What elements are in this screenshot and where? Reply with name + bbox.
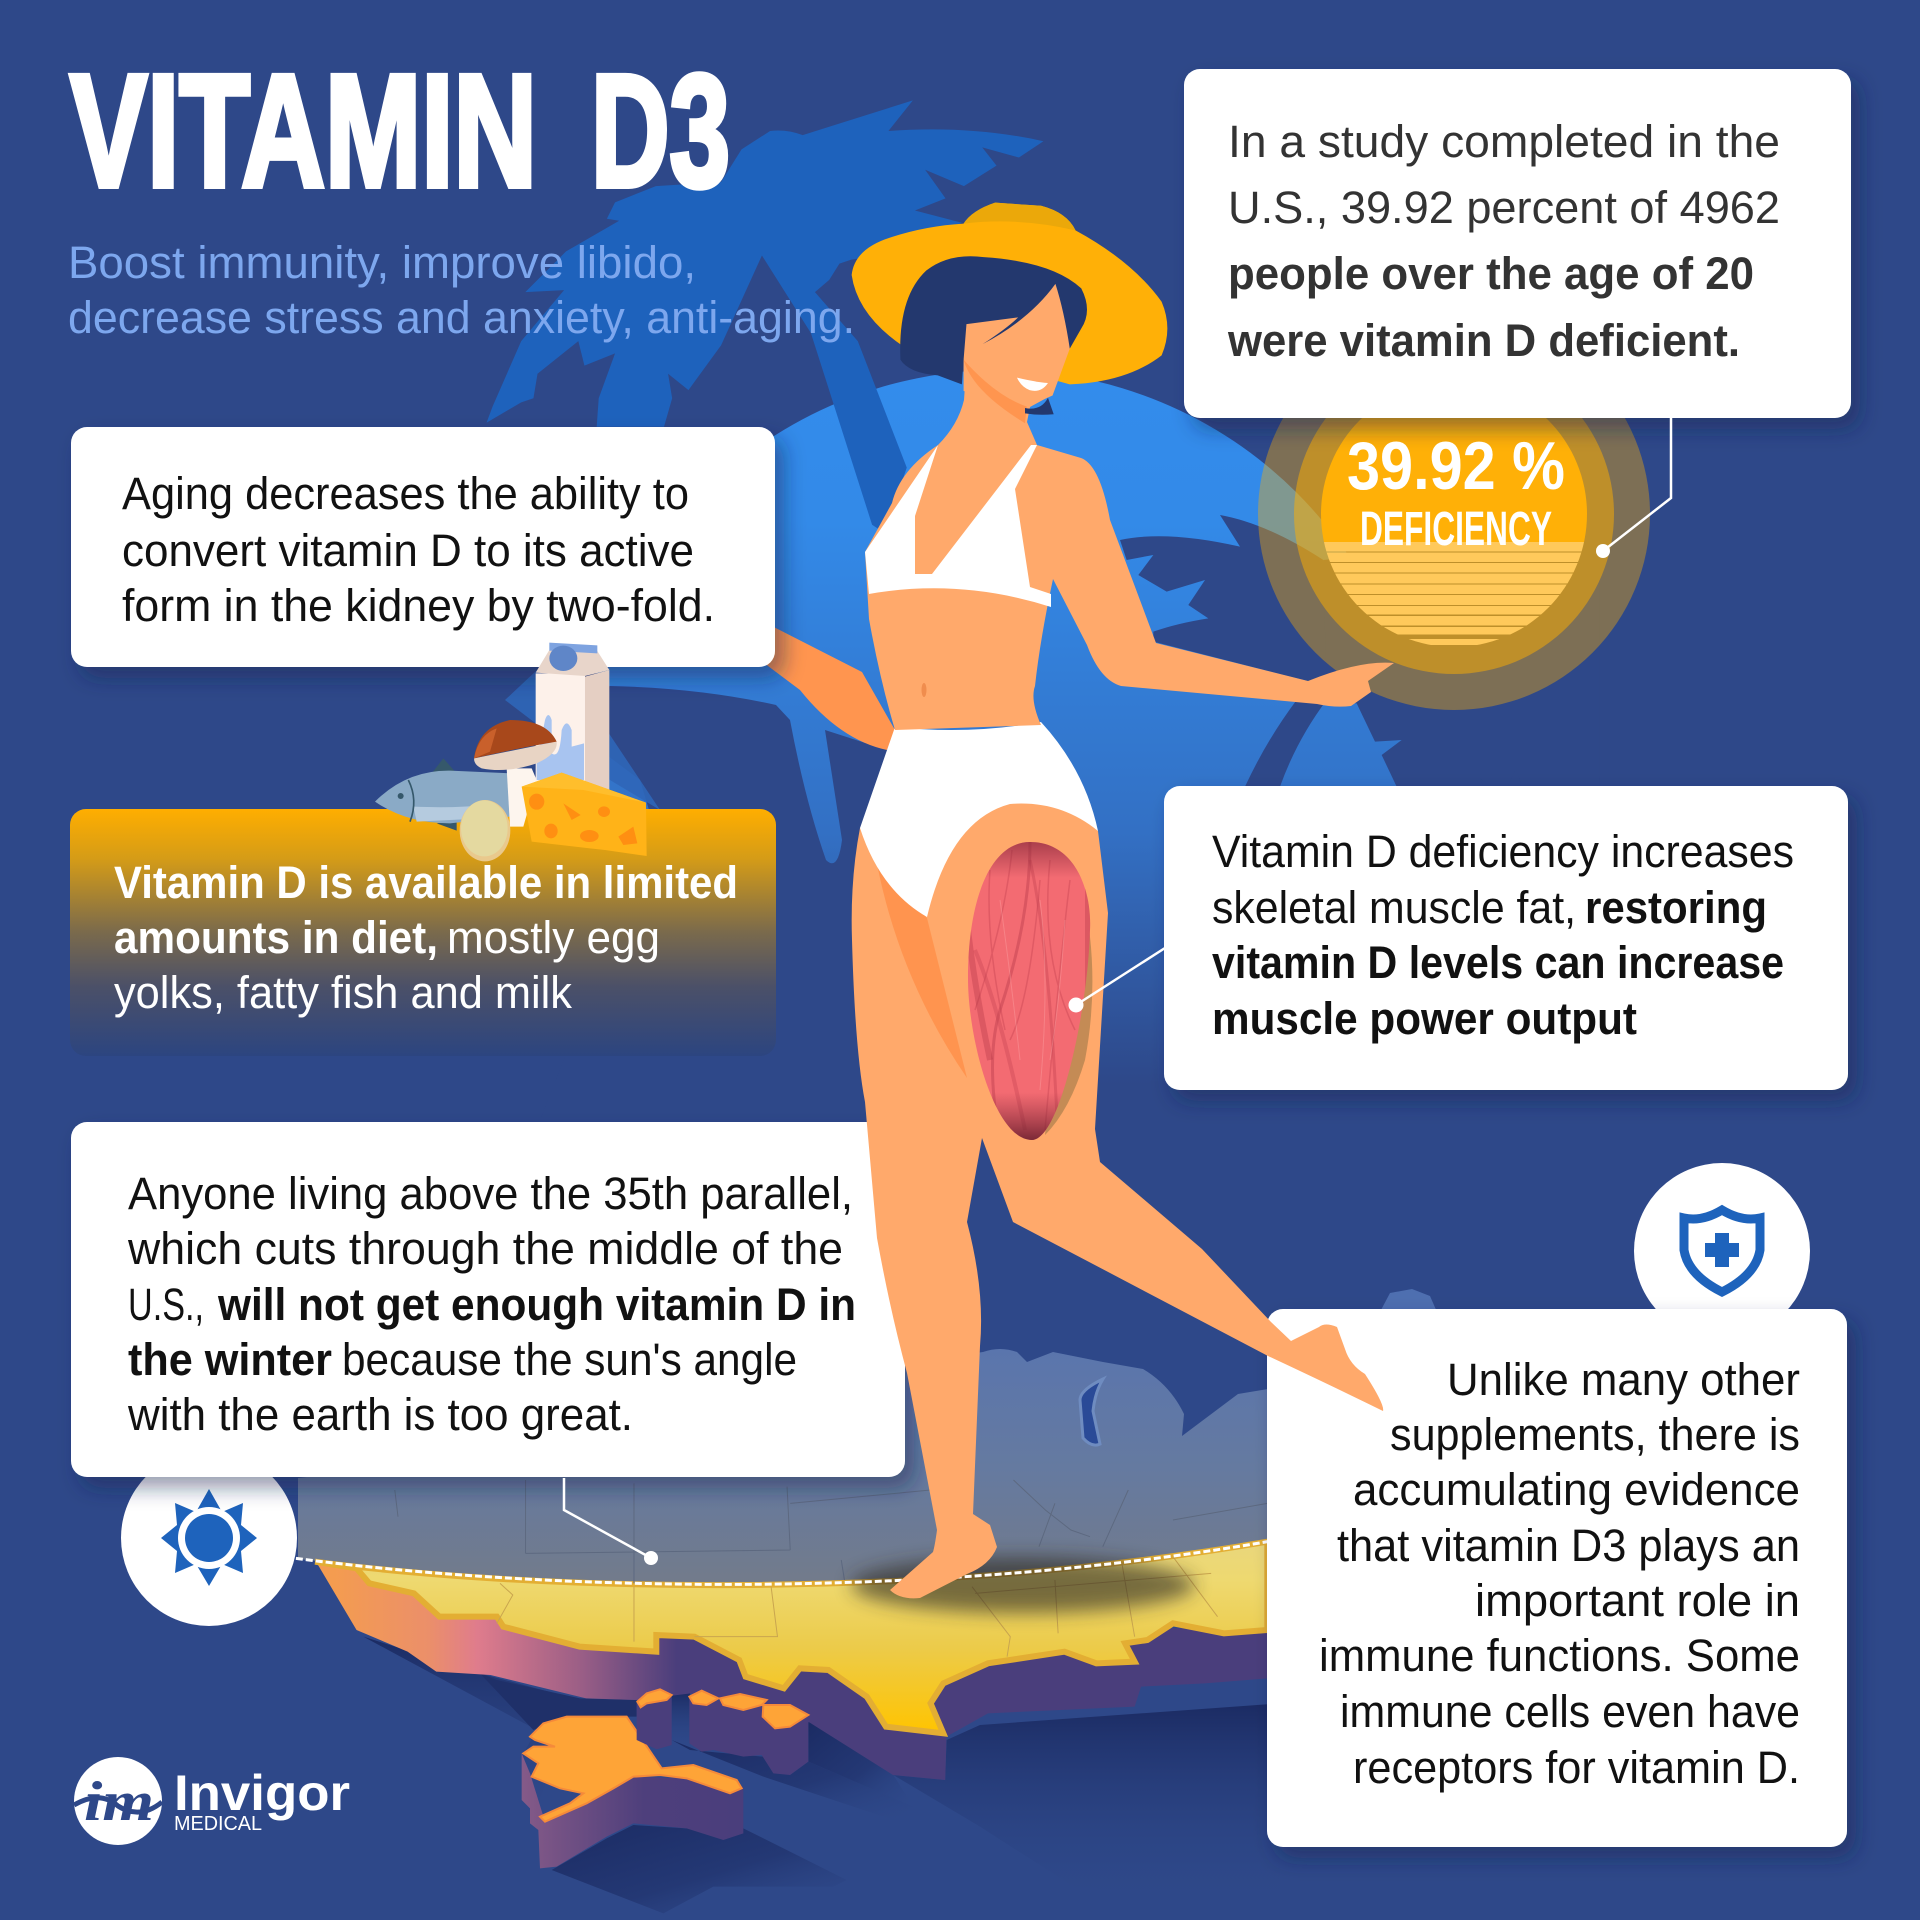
icon: milk carton bbox=[536, 643, 609, 790]
text: muscle: muscle power output bbox=[1212, 993, 1637, 1044]
figure: head bbox=[900, 256, 1087, 423]
parallel dashed line bbox=[296, 1542, 1267, 1584]
text: study: people over the age of 20 bbox=[1228, 248, 1754, 299]
text: study: were vitamin D deficient. bbox=[1227, 315, 1740, 366]
card: aging bbox=[71, 427, 775, 667]
text: study: U.S., 39.92 percent of 4962 bbox=[1228, 182, 1780, 233]
text: diet: Vitamin D is available in limited bbox=[114, 857, 738, 908]
palm tree: top bbox=[487, 100, 1043, 533]
palm leaf: lower left highlight bbox=[505, 670, 660, 810]
map: USA north, winter zone bbox=[298, 1349, 1300, 1587]
icon: mushroom bbox=[474, 720, 557, 827]
card: immune bbox=[1267, 1309, 1847, 1847]
palm fronds: lower left bbox=[540, 686, 887, 1120]
subtitle bbox=[68, 237, 855, 343]
figure: back arm bbox=[760, 620, 895, 750]
icon: cheese bbox=[522, 773, 647, 856]
card: diet bbox=[70, 809, 776, 1056]
map: side wall bbox=[315, 1560, 1267, 1780]
text: immune bbox=[1319, 1354, 1800, 1793]
text: aging: Aging decreases the ability to bbox=[122, 468, 689, 519]
text: muscle: restoring bbox=[1585, 882, 1767, 933]
text: diet bbox=[114, 857, 738, 1018]
logo: Invigor Medical: MEDICAL bbox=[174, 1813, 262, 1835]
text: diet: yolks, fatty fish and milk bbox=[114, 967, 572, 1018]
text: parallel: Anyone living above the 35th parallel, bbox=[128, 1168, 853, 1219]
text: immune: important role in bbox=[1475, 1575, 1800, 1626]
text: immune: immune cells even have bbox=[1340, 1686, 1800, 1737]
text: parallel: with the earth is too great. bbox=[127, 1389, 633, 1440]
logo: Invigor Medical bbox=[74, 1757, 350, 1845]
text: parallel: will not get enough vitamin D in bbox=[217, 1279, 856, 1330]
text: immune: receptors for vitamin D. bbox=[1353, 1742, 1800, 1793]
sun disc backdrop bbox=[580, 370, 1420, 1210]
palm tree: right bbox=[1120, 515, 1600, 787]
text: immune: immune functions. Some bbox=[1319, 1630, 1800, 1681]
text: parallel: because the sun's angle bbox=[342, 1334, 797, 1385]
title: VITAMIN bbox=[70, 41, 537, 220]
map: foot shadow bbox=[851, 1557, 1195, 1613]
map: Alaska bbox=[522, 1717, 743, 1868]
subtitle: Boost immunity, improve libido, bbox=[68, 237, 696, 288]
text: parallel: U.S., bbox=[128, 1279, 204, 1330]
map: Lake Michigan bbox=[1080, 1379, 1103, 1445]
text: study bbox=[1227, 116, 1780, 366]
figure: bikini top bbox=[865, 445, 1051, 607]
figure: navel bbox=[922, 683, 926, 697]
figure: inner thigh shade bbox=[877, 864, 967, 1078]
text: muscle: Vitamin D deficiency increases bbox=[1212, 826, 1794, 877]
text: immune: accumulating evidence bbox=[1353, 1464, 1800, 1515]
shield icon circle bbox=[1634, 1163, 1810, 1339]
icon: egg bbox=[460, 800, 510, 861]
map state lines bbox=[395, 1480, 1267, 1657]
text: muscle: vitamin D levels can increase bbox=[1212, 937, 1784, 988]
text: muscle: skeletal muscle fat, bbox=[1212, 882, 1576, 933]
map: west coast edge bbox=[299, 1480, 353, 1565]
figure: woman bbox=[852, 203, 1394, 1598]
sun badge bbox=[1258, 418, 1650, 710]
text: parallel bbox=[127, 1168, 856, 1440]
logo: Invigor Medical: im bbox=[84, 1771, 154, 1833]
map: south, sunny zone bbox=[315, 1542, 1267, 1733]
text: aging bbox=[122, 468, 715, 631]
logo: Invigor Medical: Invigor bbox=[174, 1765, 350, 1821]
text: immune: that vitamin D3 plays an bbox=[1337, 1520, 1800, 1571]
figure: legs bbox=[852, 785, 1383, 1598]
card: study bbox=[1184, 69, 1851, 418]
text: immune: supplements, there is bbox=[1390, 1409, 1800, 1460]
connector: parallel bbox=[564, 1478, 658, 1565]
subtitle: decrease stress and anxiety, anti-aging. bbox=[68, 292, 855, 343]
map: Maine peeking above card bbox=[1381, 1289, 1437, 1312]
badge value bbox=[1347, 428, 1565, 556]
icon: fish bbox=[375, 758, 510, 831]
text: study: In a study completed in the bbox=[1228, 116, 1780, 167]
card: parallel bbox=[71, 1122, 905, 1477]
text: diet: amounts in diet, bbox=[114, 912, 438, 963]
figure: exposed muscle bbox=[968, 842, 1092, 1140]
text: aging: form in the kidney by two-fold. bbox=[122, 580, 715, 631]
map: Hawaii bbox=[637, 1689, 808, 1775]
connector: sun badge bbox=[1596, 418, 1671, 558]
badge value: DEFICIENCY bbox=[1360, 503, 1552, 556]
text: aging: convert vitamin D to its active bbox=[122, 525, 694, 576]
text: parallel: which cuts through the middle of the bbox=[127, 1223, 843, 1274]
badge value: 39.92 % bbox=[1347, 428, 1565, 504]
sun icon circle bbox=[121, 1450, 297, 1626]
text: diet: mostly egg bbox=[447, 912, 660, 963]
long shadows of map bbox=[363, 1637, 1280, 1913]
figure: bikini bottom bbox=[860, 722, 1098, 917]
title: D3 bbox=[591, 41, 730, 220]
figure: hat bbox=[852, 203, 1167, 384]
figure: torso and arm bbox=[865, 284, 1394, 730]
connector: muscle bbox=[1068, 948, 1165, 1012]
text: parallel: the winter bbox=[128, 1334, 332, 1385]
text: immune: Unlike many other bbox=[1447, 1354, 1800, 1405]
text: muscle bbox=[1212, 826, 1794, 1044]
food illustration bbox=[375, 643, 647, 861]
card: muscle bbox=[1164, 786, 1848, 1090]
